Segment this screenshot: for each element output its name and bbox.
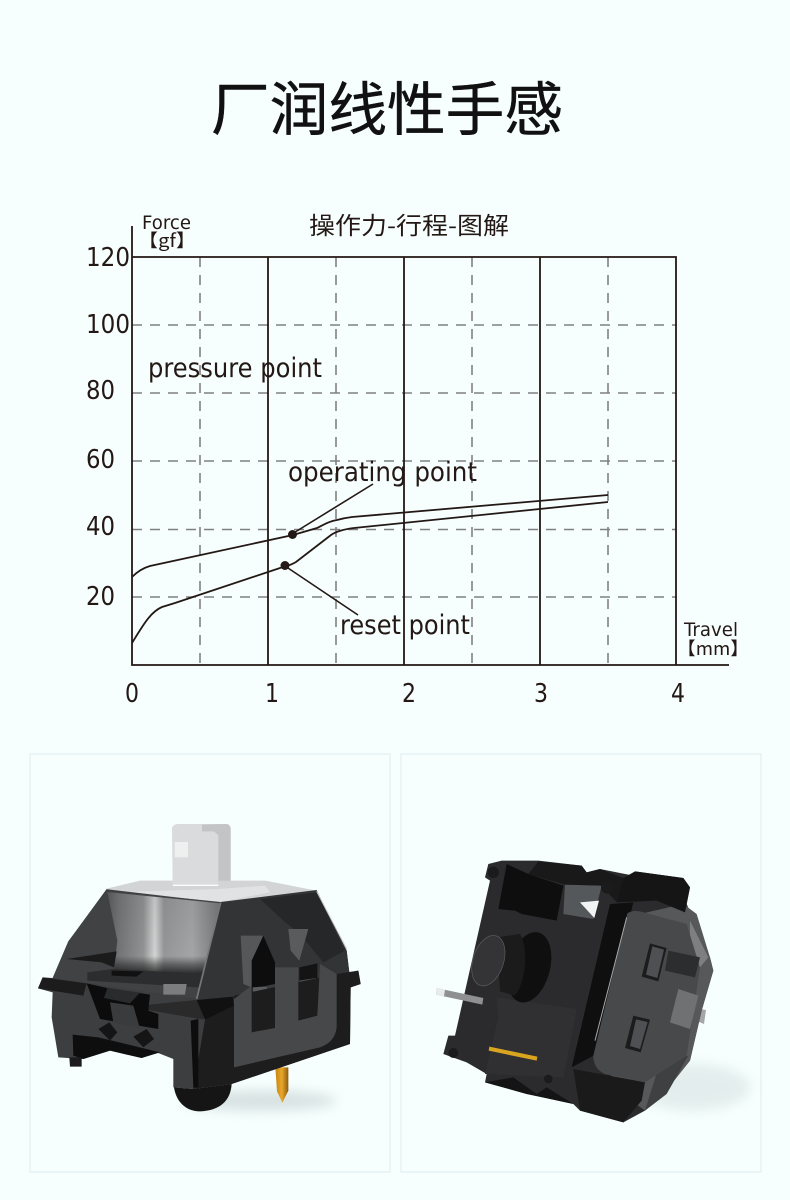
lower block bbox=[573, 1069, 645, 1122]
x axis title bbox=[677, 619, 749, 661]
x axis numbers: 1 bbox=[265, 679, 279, 709]
chart title: 操作力-行程-图解 bbox=[309, 206, 509, 241]
base flange bbox=[38, 977, 87, 996]
clip cutout bbox=[87, 983, 158, 1029]
lower plate detail bbox=[485, 997, 577, 1077]
x axis numbers: 2 bbox=[402, 679, 416, 709]
gold contact leg bbox=[489, 1047, 537, 1061]
housing right face bbox=[197, 890, 349, 1001]
stem nub bbox=[174, 1084, 232, 1111]
icon: switch underside with pins bbox=[436, 861, 750, 1122]
upper recess bbox=[498, 864, 563, 921]
force curves bbox=[132, 495, 608, 643]
top plate bbox=[105, 881, 317, 903]
reset point marker and leader bbox=[280, 561, 358, 615]
title: 厂润线性手感 bbox=[211, 63, 563, 147]
lower housing right bbox=[193, 971, 361, 1089]
y axis numbers: 80 bbox=[86, 376, 115, 406]
y axis title: 【gf】 bbox=[138, 227, 196, 253]
operating point marker and leader bbox=[288, 484, 373, 539]
round center post bbox=[466, 927, 559, 1007]
y axis title: Force bbox=[142, 212, 191, 234]
solid axes and grid lines bbox=[132, 226, 729, 665]
x axis title: Travel bbox=[683, 619, 738, 641]
chart: force vs travel bbox=[86, 206, 749, 709]
lower housing front bbox=[73, 1035, 160, 1059]
white stem post bbox=[172, 824, 231, 885]
dashed grid lines bbox=[132, 257, 676, 665]
gold contact pin bbox=[275, 1067, 288, 1103]
label: operating point: operating point bbox=[288, 457, 477, 488]
right windows bbox=[252, 936, 275, 1032]
light window bbox=[563, 885, 602, 919]
x axis numbers bbox=[125, 679, 685, 709]
y axis numbers: 120 bbox=[86, 243, 130, 273]
body silhouette bbox=[443, 861, 713, 1122]
y axis numbers: 60 bbox=[86, 445, 115, 475]
translucent side bbox=[607, 904, 713, 1111]
y axis numbers bbox=[86, 243, 130, 612]
y axis numbers: 100 bbox=[86, 310, 130, 340]
panel: switch front view bbox=[30, 754, 390, 1172]
label: pressure point: pressure point bbox=[148, 353, 322, 384]
y axis numbers: 40 bbox=[86, 512, 115, 542]
x axis numbers: 0 bbox=[125, 679, 139, 709]
x axis title: 【mm】 bbox=[677, 635, 749, 661]
mounting posts bbox=[448, 867, 614, 1083]
housing left face glass bbox=[53, 891, 221, 999]
y axis numbers: 20 bbox=[86, 582, 115, 612]
small side pin bbox=[698, 1009, 706, 1024]
icon: translucent black linear switch, front bbox=[38, 824, 361, 1111]
x axis numbers: 3 bbox=[534, 679, 548, 709]
y axis title bbox=[138, 212, 196, 253]
top ledges bbox=[528, 861, 623, 902]
translucent clip panel bbox=[593, 911, 700, 1082]
x axis numbers: 4 bbox=[671, 679, 685, 709]
panel: switch underside view bbox=[401, 754, 761, 1172]
metal contact leg bbox=[436, 988, 483, 1005]
label: reset point: reset point bbox=[340, 610, 470, 641]
body silhouette bbox=[38, 889, 361, 1089]
